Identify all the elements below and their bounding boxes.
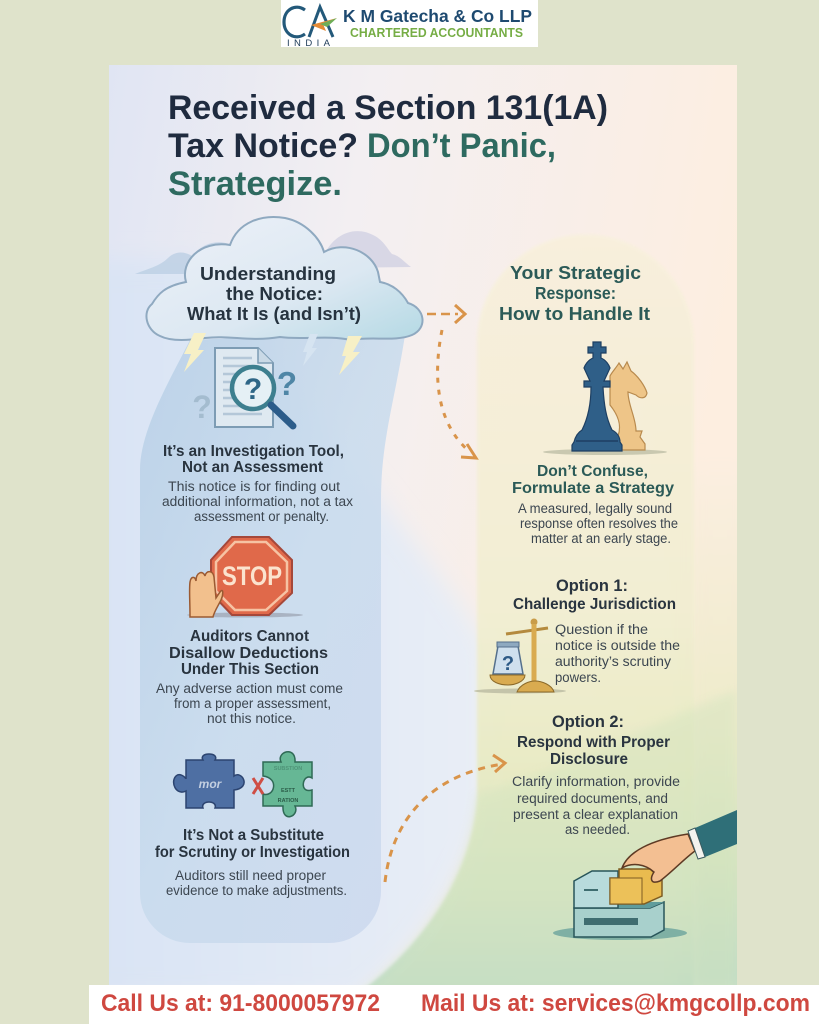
heading: strategic response [499, 262, 650, 324]
text block: option 2: Disclosure [550, 751, 628, 768]
text block: auditors cannot disallow: Auditors Cannot [190, 628, 309, 645]
text block: option 1 heading: Challenge Jurisdiction [513, 596, 676, 613]
icon: chess king and knight [543, 342, 667, 455]
contact: phone: Call Us at: 91-8000057972 [101, 990, 380, 1017]
king [572, 342, 622, 451]
heading: strategic response: Your Strategic [510, 262, 641, 283]
text block: investigation tool: Not an Assessment [182, 459, 323, 476]
icon: document and magnifier [192, 348, 297, 427]
icon: document and magnifier: ? [192, 389, 212, 425]
title [168, 89, 608, 203]
icon: document and magnifier: ? [277, 365, 297, 402]
title: Strategize. [168, 165, 342, 203]
text block: auditors cannot disallow: from a proper assessment, [174, 696, 331, 711]
icon: mismatched puzzle pieces [174, 752, 312, 817]
main panel background [80, 65, 760, 1000]
title: Tax Notice? [168, 127, 358, 165]
icon: mismatched puzzle pieces: SUBSTION [274, 766, 302, 772]
heading: understanding the notice [187, 263, 361, 324]
heading: understanding the notice: Understanding [200, 263, 336, 284]
text block: investigation tool: It’s an Investigation Tool, [163, 443, 344, 460]
icon: lightning bolts [184, 333, 362, 375]
text block: option 1 body: notice is outside the [555, 638, 680, 653]
text block: not a substitute: It’s Not a Substitute [183, 827, 324, 844]
text block: option 1 body: authority’s scrutiny [555, 654, 671, 669]
text block: auditors cannot disallow: Under This Section [181, 661, 319, 678]
text block: formulate a strategy: Don’t Confuse, [537, 463, 648, 480]
text block: formulate a strategy: A measured, legally sound [518, 501, 672, 516]
footer bar [89, 985, 819, 1024]
text block: investigation tool: additional information, not a tax [162, 494, 353, 509]
logo text: India: INDIA [287, 38, 331, 49]
logo text: firm name: K M Gatecha & Co LLP [343, 6, 532, 26]
logo text: chartered accountants: CHARTERED ACCOUNTANTS [350, 26, 523, 40]
text block: option 2: Option 2: [552, 713, 624, 731]
icon: stop sign and hand: STOP [222, 561, 282, 591]
text block: formulate a strategy: response often resolves the [520, 516, 678, 531]
text block: option 2: present a clear explanation [513, 807, 678, 822]
back clouds [135, 231, 411, 274]
text block: option 1 heading: Option 1: [556, 577, 628, 595]
text block: option 2: as needed. [565, 822, 630, 837]
panel: left column pill [140, 335, 405, 943]
text block: formulate a strategy [512, 463, 678, 546]
heading: understanding the notice: the Notice: [226, 283, 323, 304]
arrow: curved to strategy [438, 330, 476, 458]
text block: auditors cannot disallow [156, 628, 343, 726]
text block: formulate a strategy: Formulate a Strategy [512, 480, 674, 497]
text block: option 2: Respond with Proper [517, 734, 670, 751]
text block: option 1 body: powers. [555, 670, 601, 685]
text block: auditors cannot disallow: Any adverse action must come [156, 681, 343, 696]
text block: option 2: Clarify information, provide [512, 774, 680, 789]
title: Received a Section 131(1A) [168, 89, 608, 127]
text block: not a substitute: evidence to make adjustments. [166, 883, 347, 898]
text block: investigation tool: assessment or penalty. [194, 509, 329, 524]
icon: balance scale [474, 618, 566, 694]
text block: option 1 heading [513, 577, 676, 613]
icon: CA mark [284, 7, 337, 37]
text block: not a substitute: for Scrutiny or Investigation [155, 844, 350, 861]
icon: mismatched puzzle pieces: ESTT [281, 788, 296, 794]
arrow: curved to option 2 [385, 755, 505, 882]
icon: document and magnifier: ? [244, 373, 262, 406]
text block: investigation tool: This notice is for finding out [168, 479, 340, 494]
heading: strategic response: Response: [535, 283, 616, 303]
text block: auditors cannot disallow: Disallow Deductions [169, 645, 328, 662]
icon: stop sign and hand [187, 537, 303, 618]
text block: option 1 body [555, 622, 680, 685]
title: Don’t Panic, [367, 127, 556, 165]
heading: strategic response: How to Handle It [499, 303, 650, 324]
text block: formulate a strategy: matter at an early stage. [531, 531, 671, 546]
logo [281, 0, 538, 49]
heading: understanding the notice: What It Is (and Isn’t) [187, 303, 361, 324]
contact: email: Mail Us at: services@kmgcollp.com [421, 990, 810, 1017]
knight [606, 362, 647, 450]
text block: option 2: required documents, and [517, 791, 668, 806]
text block: investigation tool [162, 443, 353, 524]
arrow: cloud to response [427, 305, 465, 323]
text block: not a substitute: Auditors still need proper [175, 868, 326, 883]
icon: mismatched puzzle pieces: RATION [278, 798, 298, 804]
icon: hand filing document into cabinet [553, 810, 737, 940]
icon: balance scale: ? [502, 653, 514, 675]
text block: not a substitute [155, 827, 350, 898]
text block: option 2 [512, 713, 680, 837]
text block: option 1 body: Question if the [555, 622, 648, 637]
text block: auditors cannot disallow: not this notice. [207, 711, 296, 726]
icon: storm cloud [135, 217, 423, 375]
icon: mismatched puzzle pieces: mor [199, 777, 223, 791]
